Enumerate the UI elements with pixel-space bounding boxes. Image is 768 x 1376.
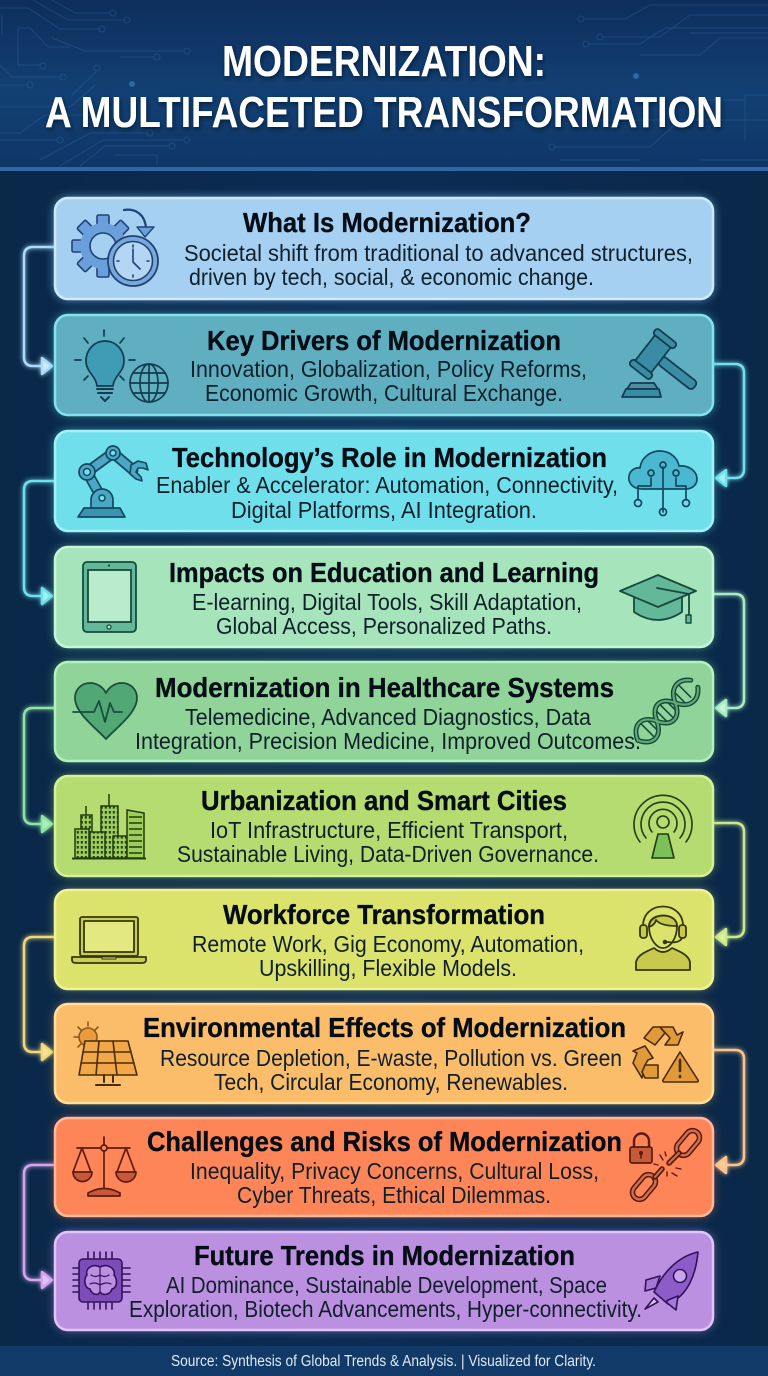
heading: Challenges and Risks of Modernization (147, 1126, 622, 1157)
description: Upskilling, Flexible Models. (259, 955, 517, 981)
description (184, 240, 693, 290)
arrow: step 3 to step 4 (24, 481, 55, 604)
icon: gavel (622, 328, 709, 405)
description: Innovation, Globalization, Policy Reforms, (190, 356, 587, 382)
panel: key drivers (55, 315, 713, 415)
arrow: step 6 to step 7 (713, 823, 744, 945)
footer source note: Source: Synthesis of Global Trends & Analysis. | Visualized for Clarity. (171, 1353, 596, 1370)
heading: Environmental Effects of Modernization (143, 1012, 626, 1043)
description (156, 472, 618, 523)
panel: environmental effects (55, 1004, 713, 1103)
panel: technology's role (55, 431, 713, 531)
header divider line (0, 167, 768, 171)
arrow: step 9 to step 10 (24, 1165, 55, 1288)
header band (0, 0, 768, 168)
icon: city skyline (72, 794, 146, 858)
description: Societal shift from traditional to advanced structures, (184, 240, 693, 266)
description: Exploration, Biotech Advancements, Hyper-connectivity. (129, 1296, 642, 1322)
description (160, 1045, 622, 1095)
icon: cloud network (629, 451, 697, 516)
icon: laptop (72, 917, 146, 963)
panel: healthcare (55, 662, 713, 761)
heading: Workforce Transformation (223, 899, 545, 930)
title: MODERNIZATION: (222, 37, 546, 86)
description: E-learning, Digital Tools, Skill Adaptation, (192, 589, 582, 615)
icon: gear and clock (72, 210, 158, 286)
icon: signal antenna (634, 795, 692, 858)
icon: solar panel and sun (74, 1022, 137, 1085)
description (192, 931, 584, 981)
icon: light bulb and globe (75, 330, 168, 402)
arrow: step 7 to step 8 (24, 937, 55, 1060)
description: Integration, Precision Medicine, Improved Outcomes. (135, 728, 641, 754)
heading: Key Drivers of Modernization (207, 325, 561, 356)
panel: smart cities (55, 776, 713, 876)
heading: Modernization in Healthcare Systems (155, 672, 614, 703)
description: Cyber Threats, Ethical Dilemmas. (237, 1182, 551, 1208)
icon: person with headset (636, 906, 690, 970)
description: Sustainable Living, Data-Driven Governance. (177, 841, 599, 867)
panel: future trends (55, 1232, 713, 1330)
arrow: step 1 to step 2 (24, 247, 55, 374)
description (129, 1272, 642, 1322)
icon: graduation cap (620, 575, 696, 623)
icon: heart with pulse (73, 683, 137, 739)
description: IoT Infrastructure, Efficient Transport, (210, 817, 568, 843)
connector arrows (24, 247, 744, 1288)
description (190, 356, 587, 406)
description: Economic Growth, Cultural Exchange. (205, 380, 563, 406)
icon: tablet (83, 562, 136, 632)
description: Inequality, Privacy Concerns, Cultural Loss, (190, 1158, 599, 1184)
description: AI Dominance, Sustainable Development, Space (166, 1272, 607, 1298)
heading: Urbanization and Smart Cities (201, 785, 567, 816)
description: Telemedicine, Advanced Diagnostics, Data (185, 704, 591, 730)
description: Remote Work, Gig Economy, Automation, (192, 931, 584, 957)
panel: education and learning (55, 547, 713, 647)
heading: What Is Modernization? (243, 207, 531, 238)
title (45, 37, 723, 137)
icon: recycling and warning (633, 1027, 698, 1082)
arrow: step 4 to step 5 (713, 594, 744, 716)
icon: lock and broken chain (630, 1128, 702, 1202)
heading: Technology’s Role in Modernization (172, 442, 607, 473)
arrow: step 8 to step 9 (713, 1050, 744, 1173)
description (135, 704, 641, 754)
description: Enabler & Accelerator: Automation, Connectivity, (156, 472, 618, 498)
panel: what is modernization (55, 198, 713, 299)
description (192, 589, 582, 639)
description (190, 1158, 599, 1208)
panel: workforce (55, 890, 713, 989)
icon: dna helix (629, 675, 703, 749)
description: driven by tech, social, & economic change. (189, 264, 594, 290)
description: Global Access, Personalized Paths. (216, 613, 552, 639)
description: Tech, Circular Economy, Renewables. (214, 1069, 568, 1095)
footer band (0, 1346, 768, 1376)
arrow: step 5 to step 6 (24, 708, 55, 832)
description: Resource Depletion, E-waste, Pollution vs. Green (160, 1045, 622, 1071)
panel: challenges and risks (55, 1118, 713, 1216)
arrow: step 2 to step 3 (713, 364, 744, 486)
heading: Impacts on Education and Learning (169, 557, 599, 588)
icon: rocket (645, 1252, 698, 1310)
icon: balance scales (73, 1137, 136, 1196)
description (177, 817, 599, 867)
icon: AI chip with brain (73, 1252, 130, 1309)
description: Digital Platforms, AI Integration. (231, 497, 537, 523)
heading: Future Trends in Modernization (194, 1240, 575, 1271)
icon: robot arm (78, 446, 148, 517)
